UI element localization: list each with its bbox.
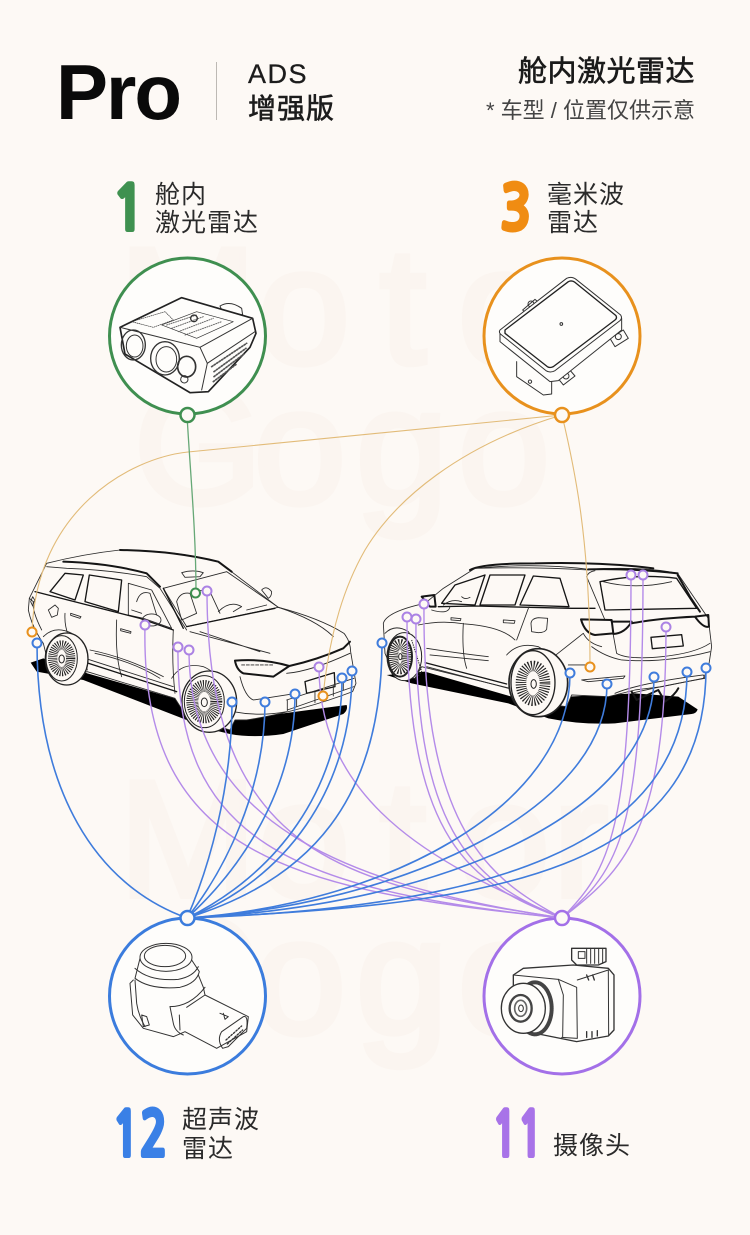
subtitle: ADS 增强版: 增强版 (248, 93, 335, 124)
rear wheel (45, 633, 88, 685)
component circle: mm-wave radar (484, 258, 640, 414)
hub nodes (180, 408, 569, 925)
title divider (216, 62, 217, 120)
heading: cabin lidar: 舱内激光雷达 (518, 55, 695, 88)
component circle: ultrasonic radar (110, 918, 266, 1074)
watermark (119, 214, 608, 1068)
car details (29, 550, 354, 714)
front wheel (182, 671, 237, 732)
label: 1 cabin lidar: 舱内 (155, 181, 207, 209)
icon: camera module (501, 948, 614, 1042)
rear wheel (509, 649, 568, 717)
car shadow (31, 658, 347, 736)
car details (385, 563, 710, 702)
label: 1 cabin lidar: 1 (112, 178, 145, 239)
front wheel (387, 633, 422, 681)
icon: lidar unit (120, 298, 256, 393)
label: 11 cameras: 摄像头 (553, 1132, 631, 1160)
label: 12 ultrasonic radar: 12 (112, 1106, 167, 1166)
label: 1 cabin lidar (112, 178, 259, 239)
sensor dots: orange (28, 628, 594, 700)
connectors: purple camera lines (145, 575, 666, 918)
component circle: lidar (110, 258, 266, 414)
connectors: orange radar lines (32, 415, 590, 696)
label: 1 cabin lidar: 激光雷达 (155, 209, 259, 237)
note: illustrative only: * 车型 / 位置仅供示意 (486, 98, 695, 123)
connectors: blue ultrasonic lines (37, 643, 706, 918)
watermark: Motor (119, 214, 608, 398)
car: rear three-quarter view (383, 563, 712, 724)
label: 3 millimetre-wave radar (500, 179, 625, 240)
title: Pro: Pro (56, 48, 180, 136)
watermark: Motor (119, 747, 608, 931)
subtitle: ADS 增强版: ADS (248, 59, 308, 89)
icon: ultrasonic sensor (130, 943, 248, 1048)
sensor dots: blue (32, 638, 710, 706)
label: 3 millimetre-wave radar: 毫米波 (547, 181, 625, 209)
connector: green lidar line (187, 415, 196, 593)
label: 11 cameras: 11 (492, 1105, 543, 1165)
car body (28, 550, 356, 730)
car shadow (387, 672, 698, 724)
label: 3 millimetre-wave radar: 雷达 (547, 209, 599, 237)
sensor dots: purple (140, 570, 670, 672)
label: 3 millimetre-wave radar: 3 (500, 179, 531, 240)
label: 12 ultrasonic radar (112, 1106, 260, 1166)
label: 12 ultrasonic radar: 超声波 (182, 1106, 260, 1134)
watermark: Gogo (134, 884, 550, 1068)
car: front three-quarter view (28, 550, 356, 736)
label: 12 ultrasonic radar: 雷达 (182, 1135, 234, 1163)
car body (383, 566, 712, 707)
label: 11 cameras (492, 1105, 631, 1165)
subtitle: ADS 增强版 (248, 59, 335, 124)
component circle: camera (484, 918, 640, 1074)
watermark: Gogo (134, 354, 550, 538)
sensor dot: green (191, 588, 200, 598)
icon: radar module (499, 277, 628, 395)
